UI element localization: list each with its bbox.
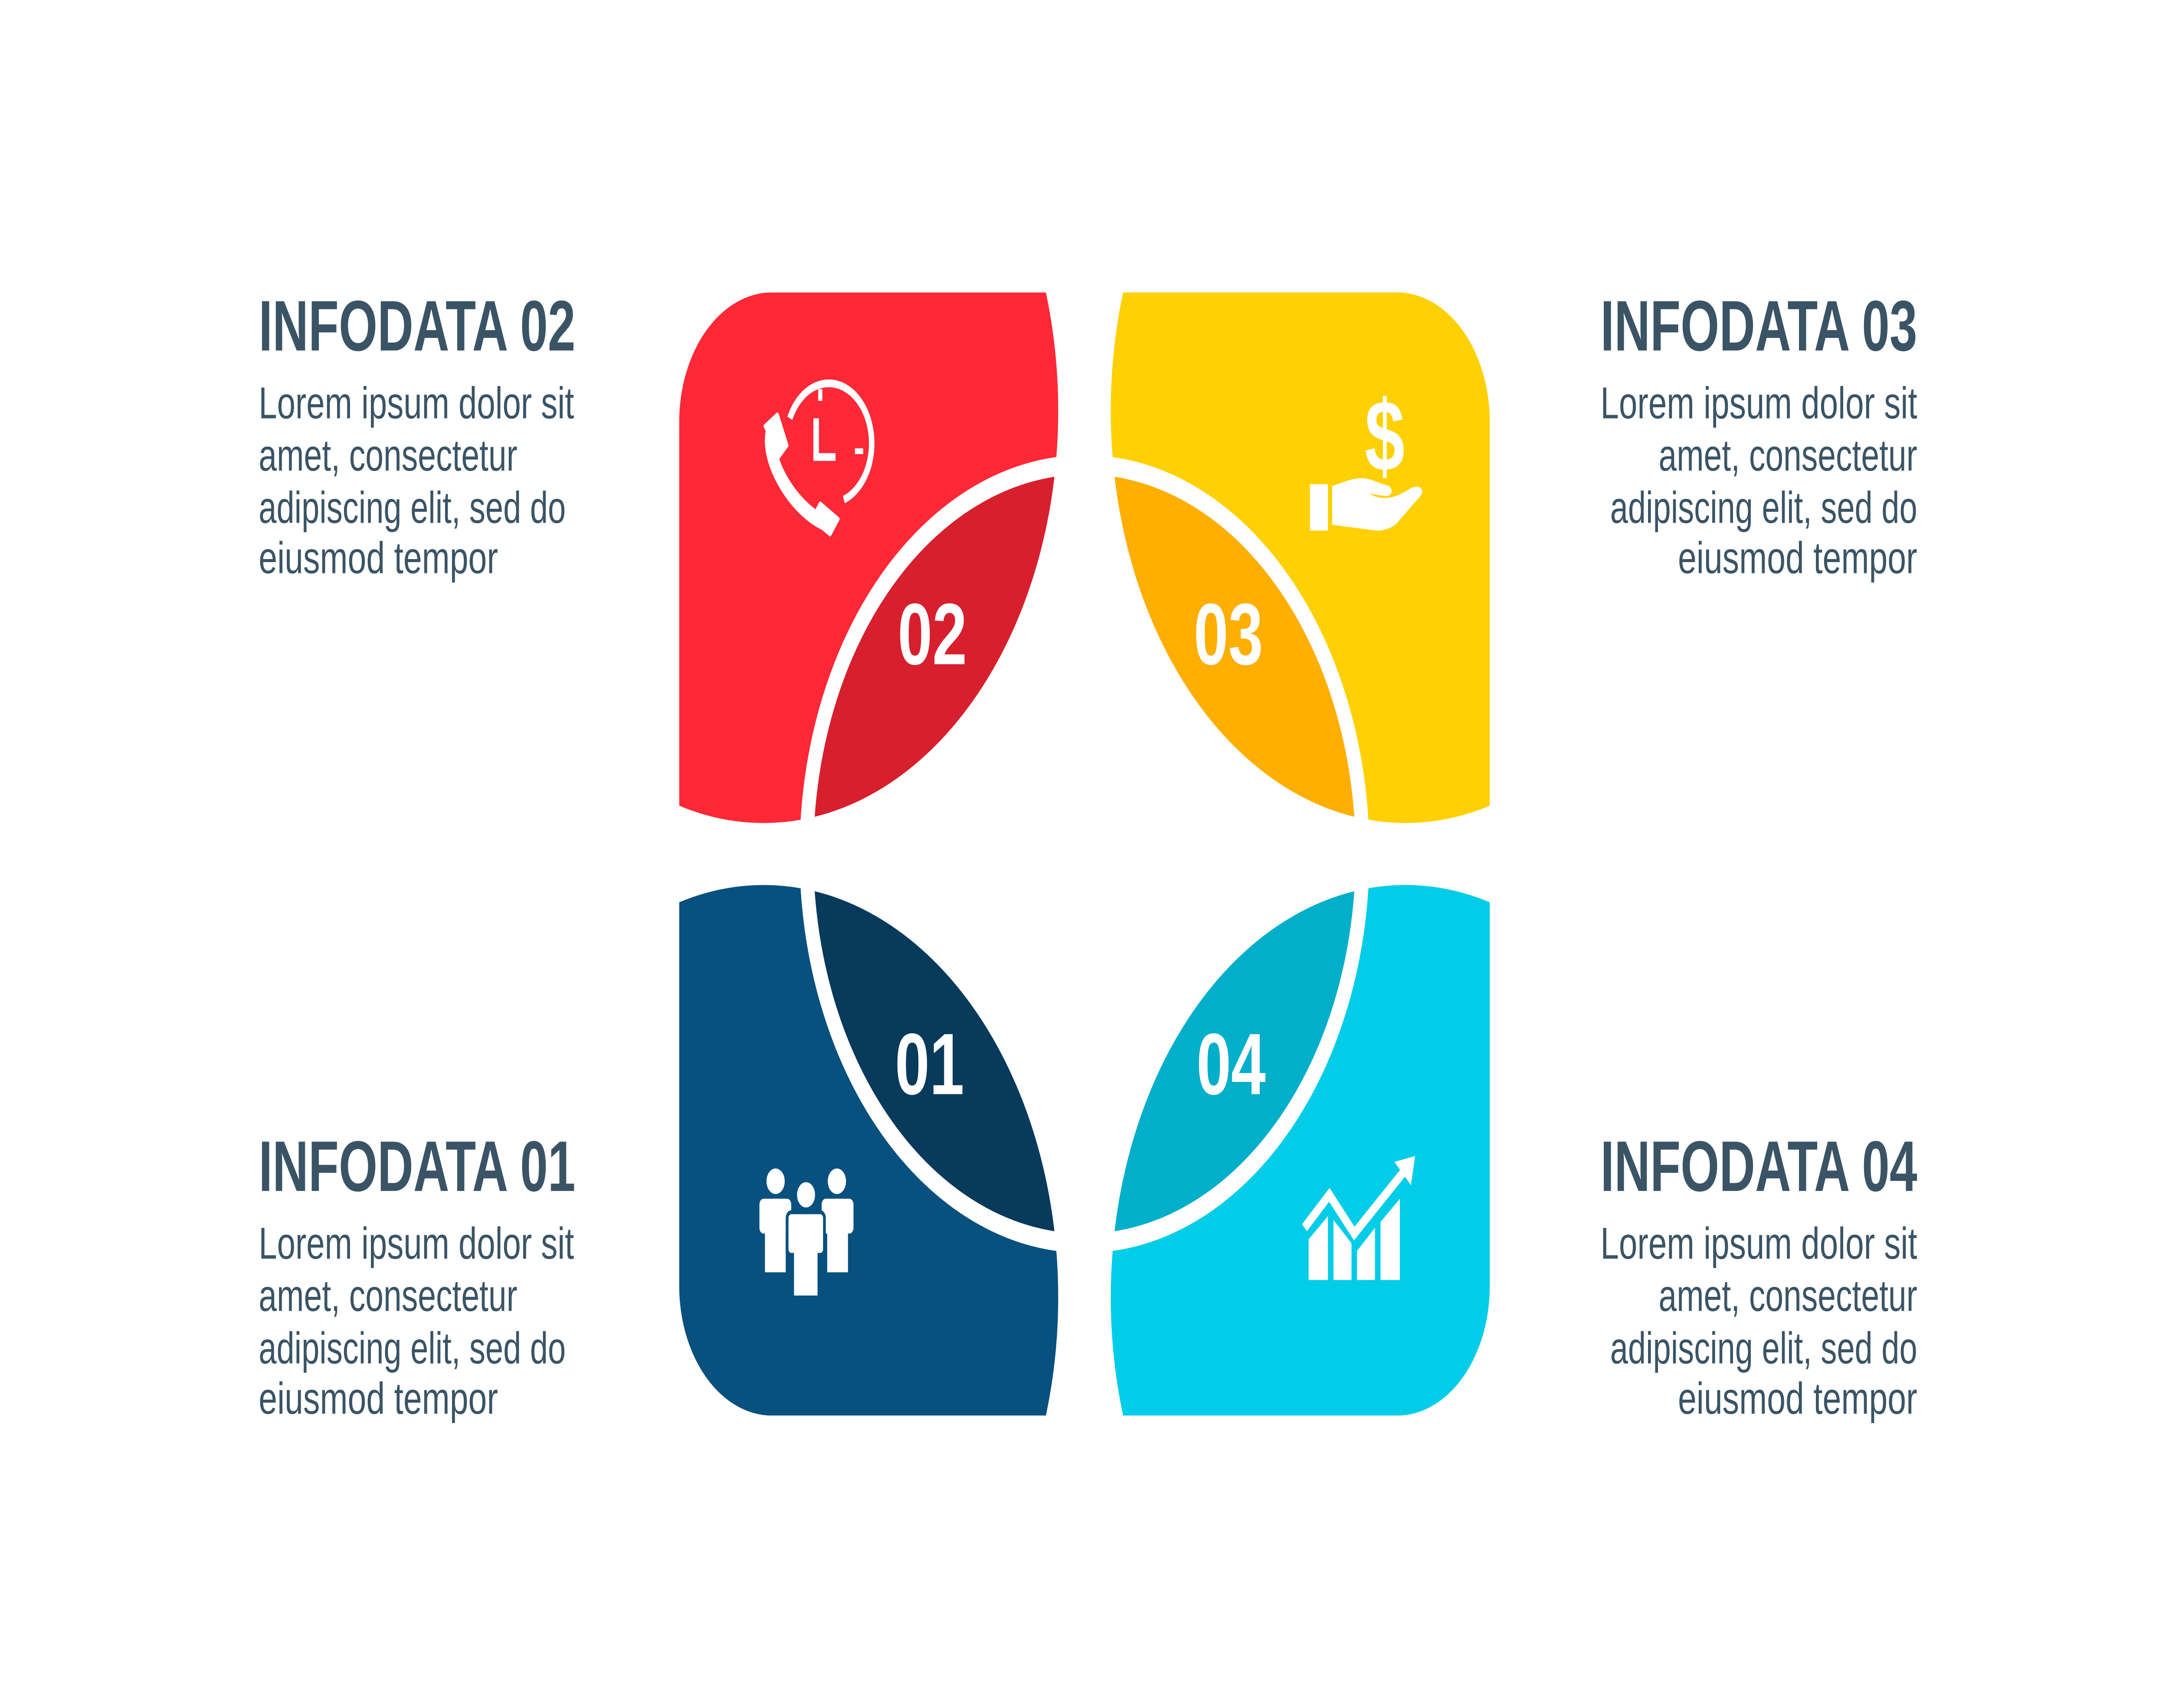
text block: infodata 04: Lorem ipsum dolor sit bbox=[1600, 1218, 1917, 1268]
panel: 04 cyan bbox=[1111, 885, 1490, 1416]
panel: 02 red bbox=[679, 292, 1058, 823]
text block: infodata 01: adipiscing elit, sed do bbox=[259, 1323, 566, 1373]
icon: phone clock bbox=[765, 383, 872, 534]
text block: infodata 03: amet, consectetur bbox=[1658, 430, 1917, 480]
text block: infodata 04: INFODATA 04 bbox=[1600, 1126, 1917, 1207]
icon: hand with dollar: $ bbox=[1365, 379, 1405, 492]
icon: hand with dollar bbox=[1310, 379, 1422, 530]
text block: infodata 04: amet, consectetur bbox=[1658, 1270, 1917, 1321]
text block: infodata 02: eiusmod tempor bbox=[259, 533, 498, 582]
text block: infodata 02: Lorem ipsum dolor sit bbox=[259, 378, 574, 428]
text block: infodata 04 bbox=[1600, 1126, 1917, 1423]
icon: growth chart bbox=[1304, 1156, 1415, 1280]
number 02: 02 bbox=[898, 586, 967, 683]
text block: infodata 02 bbox=[259, 286, 576, 582]
icon: people bbox=[760, 1168, 853, 1296]
text block: infodata 01: Lorem ipsum dolor sit bbox=[259, 1218, 574, 1268]
text block: infodata 01: INFODATA 01 bbox=[259, 1126, 576, 1207]
panel: 03 yellow bbox=[1111, 292, 1490, 823]
text block: infodata 03: adipiscing elit, sed do bbox=[1610, 482, 1917, 532]
text block: infodata 02: amet, consectetur bbox=[259, 430, 518, 480]
panel: 01 blue bbox=[679, 885, 1058, 1416]
number 04: 04 bbox=[1196, 1015, 1266, 1112]
text block: infodata 04: adipiscing elit, sed do bbox=[1610, 1323, 1917, 1373]
number 03: 03 bbox=[1194, 586, 1263, 683]
text block: infodata 01: amet, consectetur bbox=[259, 1270, 518, 1321]
text block: infodata 02: adipiscing elit, sed do bbox=[259, 482, 566, 532]
text block: infodata 03: Lorem ipsum dolor sit bbox=[1600, 378, 1917, 428]
text block: infodata 03: eiusmod tempor bbox=[1678, 533, 1917, 582]
text block: infodata 03 bbox=[1600, 286, 1917, 582]
text block: infodata 02: INFODATA 02 bbox=[259, 286, 576, 366]
text block: infodata 01: eiusmod tempor bbox=[259, 1373, 498, 1423]
text block: infodata 04: eiusmod tempor bbox=[1678, 1373, 1917, 1423]
text block: infodata 03: INFODATA 03 bbox=[1600, 286, 1917, 366]
number 01: 01 bbox=[895, 1015, 964, 1112]
text block: infodata 01 bbox=[259, 1126, 576, 1423]
